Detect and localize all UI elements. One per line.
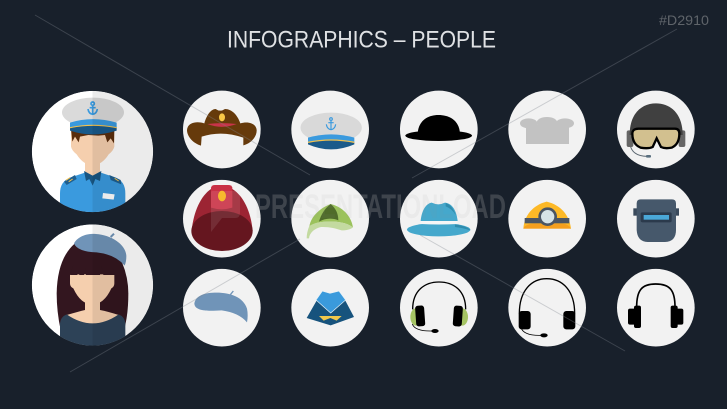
icon: beret bbox=[183, 269, 261, 346]
watermark text over circles: PRESENTATIONLOAD bbox=[255, 188, 506, 226]
icon: green cap bbox=[291, 180, 369, 257]
icon: flight attendant cap bbox=[291, 269, 369, 346]
watermark overlay bbox=[211, 188, 506, 232]
portrait: captain bbox=[32, 90, 154, 212]
icon: cowboy hat bbox=[183, 91, 261, 168]
icon: tactical helmet with goggles bbox=[617, 91, 695, 168]
watermark text on background: PRESENTATIONLOAD bbox=[255, 188, 506, 226]
icon: blue fedora bbox=[400, 180, 478, 257]
icon: red fez helmet bbox=[183, 180, 261, 257]
icon: black headset with microphone bbox=[508, 269, 586, 346]
icon: captain hat bbox=[291, 91, 369, 168]
icon: headset with green ears bbox=[400, 269, 478, 346]
product code: #D2910 bbox=[659, 12, 709, 28]
watermark logo bbox=[211, 191, 240, 232]
icon: chef hat bbox=[508, 91, 586, 168]
icon: miner helmet bbox=[508, 180, 586, 257]
icon: bowler hat bbox=[400, 91, 478, 168]
portrait: woman with beret bbox=[32, 224, 154, 346]
title: INFOGRAPHICS – PEOPLE bbox=[227, 26, 496, 54]
icon: welding mask bbox=[617, 180, 695, 257]
icon: headphones bbox=[617, 269, 695, 346]
